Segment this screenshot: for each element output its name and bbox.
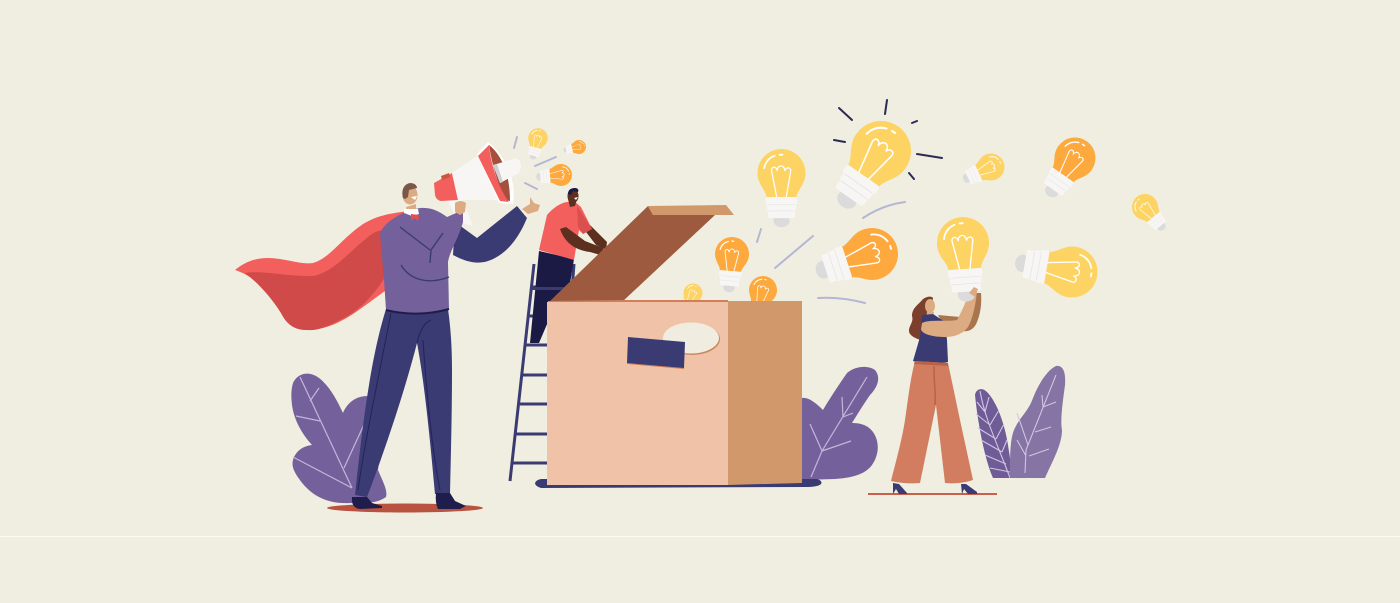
- person on ladder: [530, 188, 607, 343]
- bulbs rising from box: [675, 109, 1174, 324]
- dark trousers: [530, 251, 574, 343]
- trouser seams: [358, 313, 440, 490]
- man ground shadow: [327, 504, 483, 512]
- red cape: [235, 211, 410, 330]
- open hand: [522, 197, 540, 214]
- top edge: [548, 300, 728, 302]
- superhero man with megaphone: [235, 142, 540, 509]
- red t-shirt: [539, 201, 592, 260]
- hand on megaphone: [455, 201, 466, 215]
- white megaphone handle: [447, 198, 473, 226]
- lavender motion lines: [757, 202, 905, 303]
- long hair: [909, 297, 933, 341]
- back arm: [583, 225, 607, 250]
- megaphone: [434, 142, 521, 204]
- box lid: [548, 205, 734, 303]
- trouser shade: [934, 366, 935, 405]
- box front: [547, 302, 728, 485]
- small bulbs from megaphone: [523, 126, 587, 188]
- head: [568, 188, 578, 207]
- head: [402, 183, 419, 221]
- front arm: [921, 288, 977, 337]
- box base shadow: [535, 479, 822, 488]
- shoes: [352, 493, 466, 509]
- striped leaf: [975, 389, 1012, 478]
- sound lines: [514, 137, 556, 189]
- box side: [728, 301, 802, 485]
- cardboard box: [547, 205, 802, 485]
- shirt shade: [577, 206, 592, 234]
- wide trousers: [891, 361, 973, 483]
- shoe shadow step: [531, 287, 570, 290]
- sweater folds: [400, 227, 449, 281]
- sweater: [380, 208, 463, 314]
- fingers over bulb: [969, 287, 978, 297]
- plants right: [975, 366, 1065, 478]
- front arm: [560, 227, 604, 256]
- woman holding bulb: [891, 215, 993, 494]
- broad leaf: [1010, 366, 1065, 478]
- rays around large bulb: [834, 100, 942, 179]
- horizon line: [0, 536, 1400, 537]
- navy label: [627, 337, 685, 369]
- woman ground shadow: [868, 493, 997, 495]
- navy outstretched arm: [453, 206, 527, 263]
- heels: [893, 483, 977, 494]
- navy top: [913, 314, 948, 364]
- trousers: [355, 309, 452, 497]
- face: [925, 299, 935, 318]
- oval hole: [663, 322, 720, 355]
- back arm: [938, 293, 981, 331]
- ladder: [510, 264, 574, 481]
- held bulb: [935, 215, 993, 303]
- plant behind man: [291, 374, 386, 503]
- plant right of box: [802, 367, 878, 480]
